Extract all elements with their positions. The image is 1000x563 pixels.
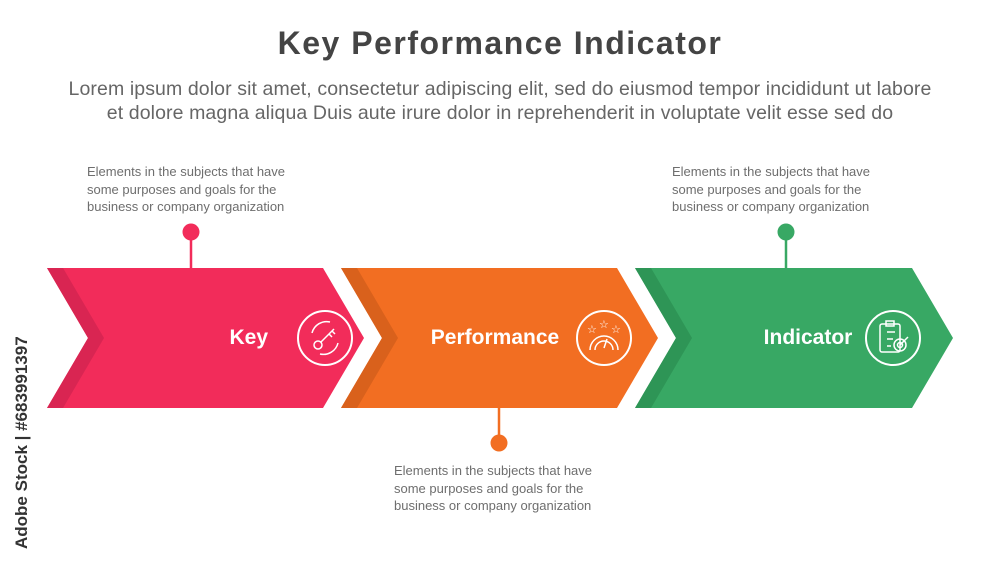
subtitle: Lorem ipsum dolor sit amet, consectetur adipiscing elit, sed do eiusmod tempor incididunt ut labore	[69, 78, 931, 100]
subtitle: et dolore magna aliqua Duis aute irure dolor in reprehenderit in voluptate velit esse sed do	[107, 102, 893, 124]
chevron: performance: ☆	[587, 324, 597, 336]
text: key description	[87, 164, 285, 214]
text: indicator description: some purposes and goals for the	[672, 182, 861, 196]
text: performance description	[394, 463, 592, 513]
chevron: performance: Performance	[431, 326, 559, 349]
title: Key Performance Indicator	[278, 25, 722, 61]
text: indicator description: Elements in the subjects that have	[672, 164, 870, 179]
chevron: key	[47, 224, 364, 408]
chevron: indicator	[635, 224, 953, 408]
text: indicator description	[672, 164, 870, 214]
text: performance description: Elements in the subjects that have	[394, 463, 592, 478]
text: key description: business or company organization	[87, 199, 284, 214]
chevron: key: Key	[229, 326, 268, 349]
watermark side text: Adobe Stock | #683991397	[12, 336, 31, 549]
text: key description: Elements in the subjects that have	[87, 164, 285, 179]
chevron: indicator: Indicator	[764, 326, 852, 349]
text: key description: some purposes and goals for the	[87, 182, 276, 196]
chevron: performance	[341, 268, 658, 452]
subtitle	[69, 78, 931, 124]
text: performance description: some purposes and goals for the	[394, 480, 583, 496]
chevron: performance: ☆	[599, 319, 609, 331]
text: performance description: business or company organization	[394, 498, 591, 513]
chevron: performance: ☆	[611, 324, 621, 336]
text: indicator description: business or company organization	[672, 199, 869, 214]
